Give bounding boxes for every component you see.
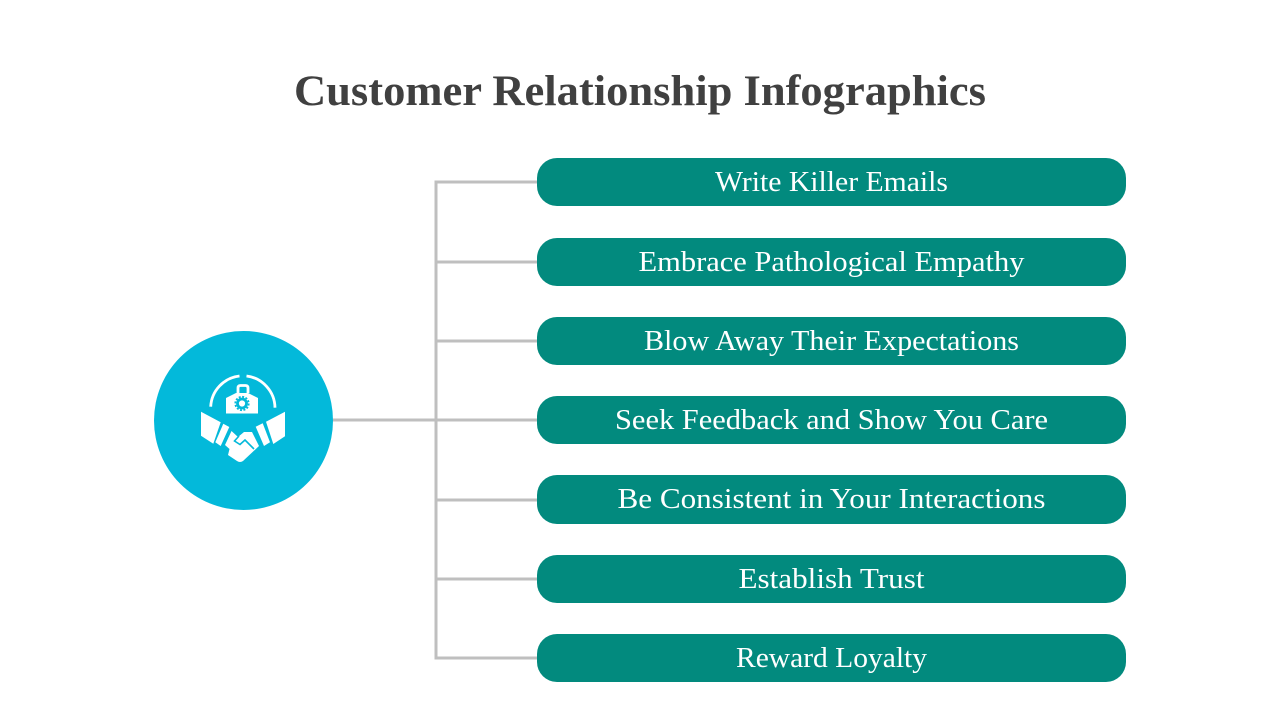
pill: Reward Loyalty: Reward Loyalty (736, 642, 928, 674)
title: Customer Relationship Infographics (294, 68, 986, 115)
pill: Establish Trust (537, 555, 1126, 603)
pill: Embrace Pathological Empathy (537, 238, 1126, 286)
pill: Blow Away Their Expectations (537, 317, 1126, 365)
connector lines (333, 182, 537, 658)
icon: handshake with briefcase (201, 376, 285, 462)
pill: Write Killer Emails: Write Killer Emails (715, 166, 948, 198)
pill: Write Killer Emails (537, 158, 1126, 206)
pill: Be Consistent in Your Interactions: Be Consistent in Your Interactions (618, 483, 1046, 515)
central circle icon (154, 331, 333, 510)
pill: Embrace Pathological Empathy: Embrace Pathological Empathy (638, 246, 1025, 278)
pill: Seek Feedback and Show You Care: Seek Feedback and Show You Care (615, 404, 1048, 436)
pill: Be Consistent in Your Interactions (537, 475, 1126, 524)
pill: Seek Feedback and Show You Care (537, 396, 1126, 444)
pill: Reward Loyalty (537, 634, 1126, 682)
pill: Blow Away Their Expectations: Blow Away Their Expectations (644, 325, 1019, 357)
pill: Establish Trust: Establish Trust (738, 563, 924, 595)
